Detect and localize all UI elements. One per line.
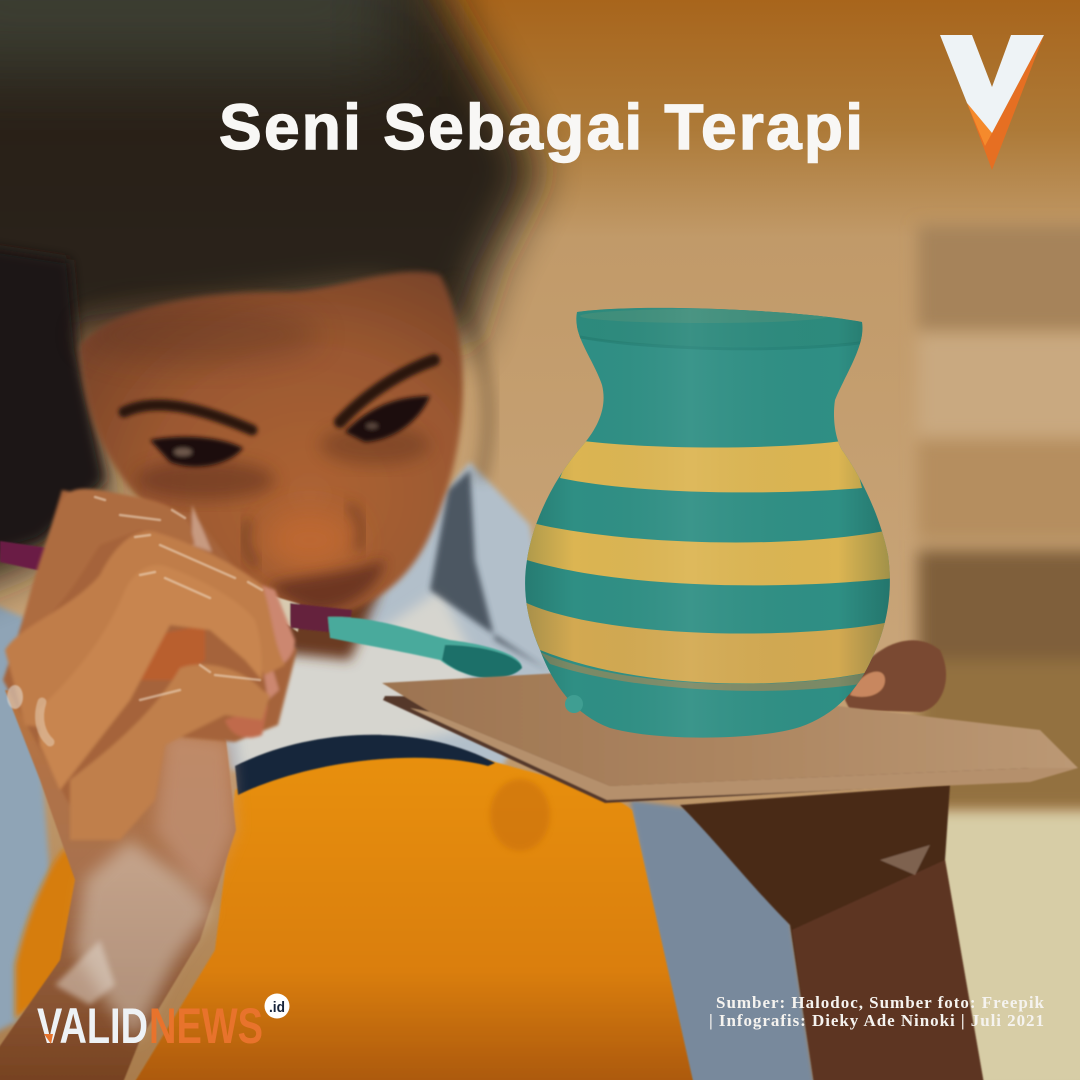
hand highlights and clay marks bbox=[7, 497, 262, 742]
credits bbox=[709, 993, 1045, 1030]
logo: Valid News wordmark: NEWS bbox=[149, 998, 263, 1054]
left hand bbox=[3, 489, 297, 840]
logo: V mark bbox=[940, 35, 1044, 170]
logo: Valid News wordmark bbox=[37, 994, 290, 1054]
credits: | Infografis: Dieky Ade Ninoki | Juli 2021 bbox=[709, 1011, 1044, 1030]
eyebrows and eyes bbox=[124, 360, 434, 467]
wooden board bbox=[382, 673, 1078, 803]
credits: Sumber: Halodoc, Sumber foto: Freepik bbox=[716, 993, 1045, 1012]
ceramic vase bbox=[525, 308, 890, 738]
title: Seni Sebagai Terapi bbox=[219, 91, 863, 163]
person: apron bbox=[15, 735, 695, 1080]
paint brush bbox=[0, 541, 522, 678]
nose and mouth shading bbox=[245, 520, 258, 565]
logo: Valid News wordmark: .id bbox=[269, 999, 285, 1016]
person: hair bbox=[0, 0, 540, 600]
logo: Valid News wordmark: VALID bbox=[37, 998, 148, 1054]
right hand and forearm under board bbox=[680, 640, 985, 1080]
person: shirt bbox=[0, 462, 815, 1080]
person: neck shadow bbox=[240, 590, 380, 660]
left forearm bbox=[0, 690, 236, 1080]
person: face bbox=[80, 272, 463, 615]
